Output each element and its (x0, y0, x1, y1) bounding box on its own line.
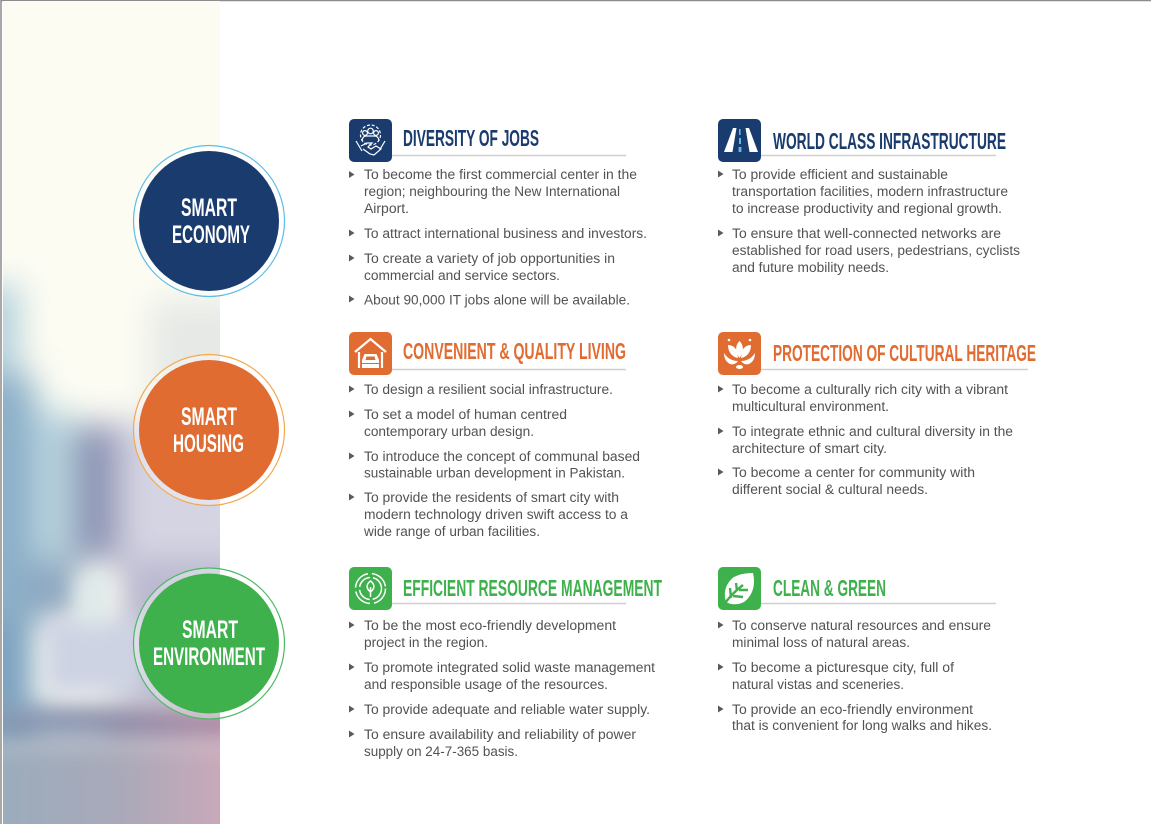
bullet list: established for road users, pedestrians, cyclists (732, 243, 1020, 258)
bullet list (718, 167, 1020, 275)
bullet list: To introduce the concept of communal based (364, 449, 640, 464)
icon: people and handshake (349, 119, 392, 162)
panel: protection of cultural heritage (718, 332, 1036, 497)
panel: convenient and quality living (349, 332, 640, 539)
circle: smart housing: HOUSING (173, 430, 244, 458)
bullet list: To become a culturally rich city with a vibrant (732, 382, 1008, 397)
circle: smart housing (134, 354, 284, 506)
bullet list: wide range of urban facilities. (363, 524, 540, 539)
panel: diversity of jobs (349, 119, 647, 308)
bullet list: and future mobility needs. (732, 260, 889, 275)
circle: smart economy: SMART (181, 194, 237, 222)
bullet list: sustainable urban development in Pakistan. (364, 466, 625, 480)
bullet list: multicultural environment. (732, 399, 889, 414)
bullet list: supply on 24-7-365 basis. (364, 744, 518, 759)
icon: lotus (718, 332, 761, 375)
panel: world class infrastructure (718, 119, 1020, 275)
icon: leaf (718, 567, 761, 610)
bullet list: To become a picturesque city, full of (732, 660, 954, 675)
bullet list: To become a center for community with (732, 465, 975, 480)
circle: smart environment: ENVIRONMENT (153, 643, 265, 671)
panel: clean and green (718, 567, 996, 733)
bullet list (718, 618, 992, 733)
bullet list: To conserve natural resources and ensure (732, 618, 991, 633)
bullet list (349, 167, 647, 308)
bullet list: modern technology driven swift access to a (364, 507, 628, 522)
bullet list: commercial and service sectors. (364, 268, 560, 283)
icon: house with car (349, 332, 392, 375)
bullet list (718, 382, 1013, 497)
bullet list: To integrate ethnic and cultural diversity in the (732, 424, 1013, 439)
bullet list: transportation facilities, modern infrastructure (732, 184, 1008, 199)
circle: smart environment (134, 568, 284, 719)
bullet list: project in the region. (364, 635, 488, 650)
bullet list: To set a model of human centred (364, 407, 567, 422)
bullet list: To design a resilient social infrastructure. (364, 382, 613, 397)
bullet list: To attract international business and investors. (364, 226, 647, 241)
bullet list: To provide an eco-friendly environment (732, 702, 973, 717)
bullet list: that is convenient for long walks and hikes. (732, 718, 992, 733)
bullet list: To ensure that well-connected networks are (732, 226, 1001, 241)
bullet list: different social & cultural needs. (732, 482, 928, 497)
bullet list: contemporary urban design. (364, 424, 534, 439)
bullet list: About 90,000 IT jobs alone will be available. (364, 292, 630, 308)
icon: road (718, 119, 761, 162)
bullet list: To be the most eco-friendly development (364, 618, 616, 633)
circle: smart environment: SMART (182, 616, 238, 644)
bullet list: region; neighbouring the New International (364, 184, 620, 199)
heading: DIVERSITY OF JOBS (403, 125, 539, 151)
circle: smart housing: SMART (181, 403, 237, 431)
bullet list: To provide the residents of smart city with (364, 490, 619, 505)
bullet list: To provide efficient and sustainable (732, 167, 948, 182)
circle: smart economy (134, 146, 284, 296)
heading: CONVENIENT & QUALITY LIVING (403, 338, 626, 364)
bullet list: To create a variety of job opportunities in (364, 251, 615, 266)
panel: blurred city background (3, 1, 220, 824)
circle: smart economy: ECONOMY (172, 221, 250, 249)
bullet list (349, 382, 640, 539)
bullet list: to increase productivity and regional growth. (732, 201, 1002, 216)
bullet list: To provide adequate and reliable water supply. (364, 702, 650, 717)
bullet list: To ensure availability and reliability of power (364, 727, 637, 742)
heading: CLEAN & GREEN (773, 575, 886, 601)
bullet list: minimal loss of natural areas. (732, 635, 910, 650)
bullet list: To promote integrated solid waste management (364, 660, 655, 675)
bullet list: To become the first commercial center in the (364, 167, 637, 182)
bullet list: Airport. (364, 201, 409, 216)
bullet list: and responsible usage of the resources. (364, 677, 608, 692)
bullet list: natural vistas and sceneries. (732, 677, 904, 692)
bullet list (349, 618, 655, 759)
panel: efficient resource management (349, 567, 662, 759)
icon: resource cycle (349, 567, 392, 610)
bullet list: architecture of smart city. (732, 441, 887, 456)
heading: EFFICIENT RESOURCE MANAGEMENT (403, 575, 662, 601)
